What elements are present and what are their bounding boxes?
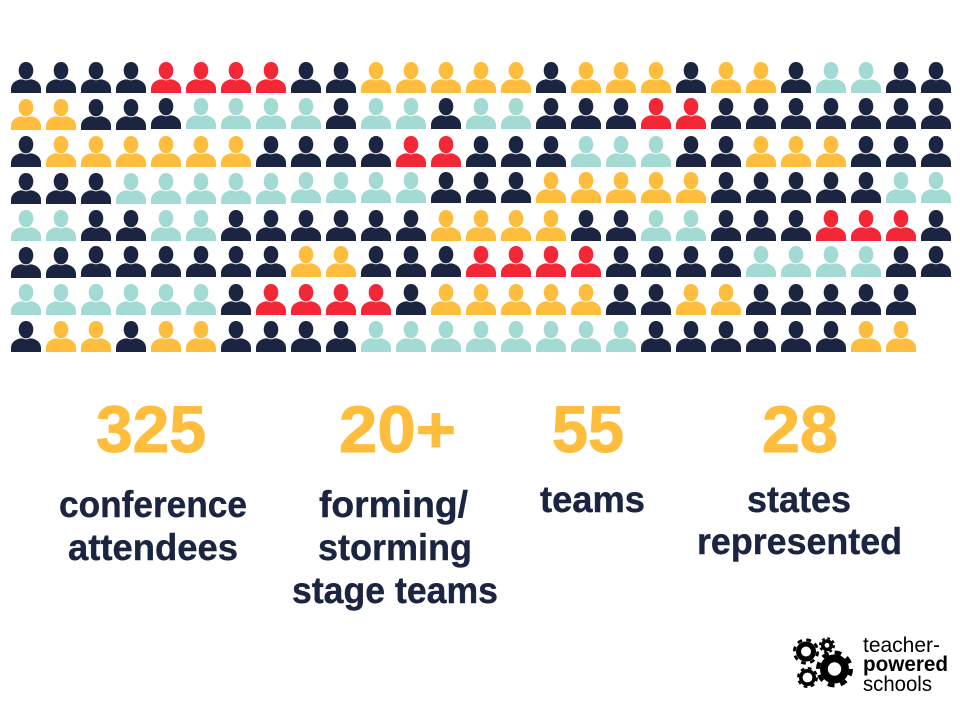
stat: 55 teams: 55 (552, 392, 624, 466)
logo: teacher-powered schools: powered (863, 653, 948, 676)
logo: teacher-powered schools: schools (863, 673, 932, 696)
stat: 55 teams (540, 392, 645, 520)
stat: 325 conference attendees: attendees (68, 527, 238, 568)
stat: 28 states represented: represented (697, 521, 902, 562)
stat: 20+ forming/storming stage teams: forming/ (319, 484, 468, 525)
logo: teacher-powered schools (794, 634, 948, 696)
stat: 20+ forming/storming stage teams: 20+ (339, 392, 456, 466)
stat: 325 conference attendees (59, 392, 247, 568)
people row 2 (11, 98, 951, 130)
stat: 325 conference attendees: 325 (96, 392, 206, 466)
stat: 20+ forming/storming stage teams: storming (318, 527, 472, 568)
stat: 28 states represented: 28 (762, 392, 838, 466)
people row 3 (11, 136, 951, 167)
stat: 28 states represented (697, 392, 902, 562)
people row 8 (11, 321, 916, 352)
people grid (11, 62, 951, 352)
stat: 20+ forming/storming stage teams (292, 392, 498, 611)
people row 4 (11, 172, 951, 204)
stat: 325 conference attendees: conference (59, 484, 247, 525)
logo: teacher-powered schools: teacher- (863, 634, 940, 657)
people row 1 (11, 62, 951, 93)
stat: 55 teams: teams (540, 479, 645, 520)
people row 7 (11, 284, 916, 315)
people row 5 (11, 210, 951, 241)
icon: gears (794, 638, 851, 687)
people row 6 (11, 246, 951, 278)
stat: 28 states represented: states (747, 479, 851, 520)
stat: 20+ forming/storming stage teams: stage teams (292, 570, 498, 611)
